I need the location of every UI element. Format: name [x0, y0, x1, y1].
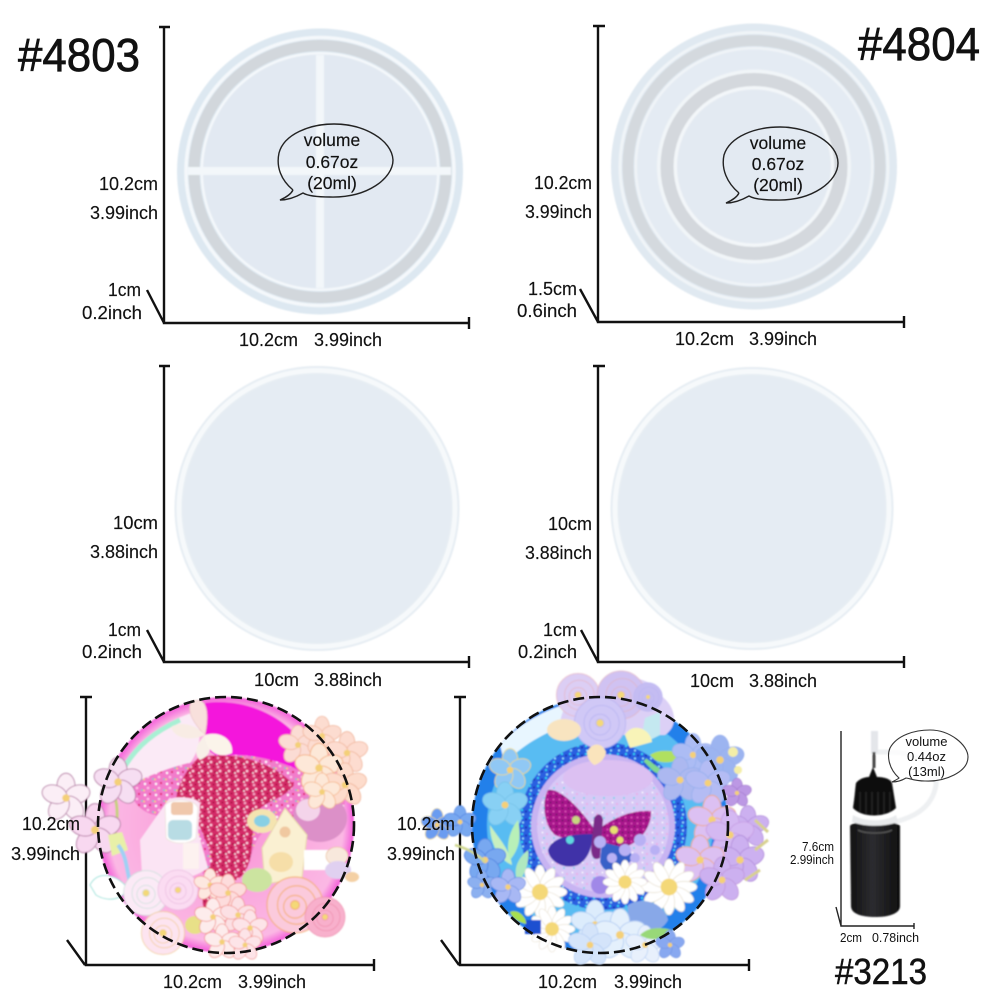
cream ticket tag: [140, 797, 208, 879]
purple pearl cluster: [293, 794, 347, 842]
glitter ring: [519, 742, 687, 910]
magenta top-right area: [205, 702, 314, 800]
dimension labels #4803: 0.2inch: [82, 302, 142, 323]
bottle body: [850, 822, 900, 917]
callout: volume #4804: (20ml): [753, 175, 803, 195]
axes for needle bottle: [836, 731, 914, 929]
callout: volume #4803: 0.67oz: [306, 152, 358, 172]
dimension labels lid right: 3.88inch: [749, 670, 817, 691]
dimension labels #4804: 10.2cm: [675, 328, 734, 349]
cap: [853, 767, 896, 816]
dimension labels pink coaster: 10.2cm: [22, 813, 80, 834]
dashed outline butterfly coaster: [472, 697, 728, 953]
dimension labels lid left: [82, 512, 382, 690]
blossoms bottom centre: [185, 868, 272, 962]
dimension labels butterfly coaster: 3.99inch: [614, 971, 682, 992]
daisies bottom: [513, 859, 697, 952]
dimension labels lid left: 3.88inch: [314, 669, 382, 690]
dimension labels #4804: 1.5cm: [528, 278, 577, 299]
butterfly: [544, 790, 651, 872]
dimension labels #4803: [82, 173, 382, 350]
white butterfly: [171, 700, 232, 760]
callout: volume #4804: volume: [750, 133, 806, 153]
axes for pink floral coaster: [67, 697, 374, 971]
axes for mold #4803: [147, 27, 469, 329]
dimension labels butterfly coaster: 10.2cm: [538, 971, 597, 992]
dimension labels bottle: 2cm: [840, 931, 862, 945]
dimension labels pink coaster: [11, 813, 306, 992]
dimension labels #4804: 3.99inch: [749, 328, 817, 349]
dimension labels bottle: 0.78inch: [872, 931, 919, 945]
dimension labels lid right: 10cm: [548, 513, 592, 534]
callout: volume #4804: 0.67oz: [752, 154, 804, 174]
callout: bottle volume: volume: [906, 734, 947, 749]
dimension labels #4803: 3.99inch: [90, 202, 158, 223]
light blue blossoms bottom: [566, 900, 686, 968]
dimension labels #4804: 10.2cm: [534, 172, 592, 193]
cream birdhouse: [262, 808, 307, 884]
dimension labels #4804: [517, 172, 817, 349]
mold #4804 with concentric rings: [611, 24, 897, 310]
dimension labels bottle: [790, 840, 919, 945]
dimension labels pink coaster: 3.99inch: [11, 843, 80, 864]
dimension labels butterfly coaster: 10.2cm: [397, 813, 455, 834]
dimension labels #4803: 1cm: [108, 279, 141, 300]
dimension labels lid right: 1cm: [543, 619, 577, 640]
glitter canopy: [130, 755, 345, 880]
axes for lid mold right: [581, 366, 904, 668]
lavender roses top: [547, 671, 688, 775]
dimension labels lid left: 10cm: [254, 669, 299, 690]
green leaves and forget-me-nots left: [419, 749, 541, 934]
dimension labels lid right: [518, 513, 817, 691]
dimension labels #4803: 10.2cm: [239, 329, 298, 350]
roses bottom: [124, 870, 345, 955]
small mouse figure: [325, 847, 359, 882]
callout: volume #4803: (20ml): [307, 173, 357, 193]
dimension labels butterfly coaster: 3.99inch: [387, 843, 455, 864]
dimension labels bottle: 7.6cm: [802, 840, 834, 854]
axes for butterfly coaster: [441, 697, 749, 971]
dimension labels lid left: 0.2inch: [82, 641, 142, 662]
dimension labels #4804: 0.6inch: [517, 300, 577, 321]
dimension labels lid right: 3.88inch: [525, 542, 592, 563]
dimension labels lid left: 10cm: [113, 512, 158, 533]
example: pink floral resin coaster: [40, 697, 370, 962]
flat lid mold right: [610, 367, 894, 650]
callout: bottle volume: 0.44oz: [907, 749, 946, 764]
axes for mold #4804: [580, 26, 904, 328]
heading: #4803: #4803: [18, 29, 140, 81]
dimension labels #4804: 3.99inch: [525, 201, 592, 222]
callout: bottle volume: [889, 730, 968, 782]
clear cap and tube: [855, 752, 936, 825]
dimension labels lid left: 1cm: [108, 619, 141, 640]
dimension labels lid left: 3.88inch: [90, 541, 158, 562]
heading: #4804: #4804: [858, 18, 980, 70]
example: blue butterfly resin coaster: [419, 671, 771, 968]
lilac centre: [537, 760, 669, 892]
callout: volume #4804: [723, 127, 838, 203]
pink lilies left: [40, 757, 144, 899]
blue flowers upper right: [655, 734, 746, 807]
pale left sky area: [112, 712, 200, 795]
peach flowers top right: [277, 716, 370, 811]
dimension labels pink coaster: 3.99inch: [238, 971, 306, 992]
dashed outline pink coaster: [98, 697, 354, 953]
dimension labels pink coaster: 10.2cm: [163, 971, 222, 992]
dimension labels #4803: 3.99inch: [314, 329, 382, 350]
heading: #3213: #3213: [835, 951, 927, 992]
flat lid mold left: [174, 366, 460, 651]
dimension labels bottle: 2.99inch: [790, 853, 834, 867]
dimension labels lid right: 10cm: [690, 670, 734, 691]
dimension labels #4803: 10.2cm: [99, 173, 158, 194]
axes for lid mold left: [147, 366, 469, 668]
callout: volume #4803: [278, 124, 393, 200]
callout: volume #4803: volume: [304, 130, 360, 150]
red glitter tree: [176, 755, 294, 918]
dimension labels lid right: 0.2inch: [518, 641, 577, 662]
pearls: [591, 834, 660, 894]
mold #4803 with cross divider: [177, 28, 463, 314]
dimension labels butterfly coaster: [387, 813, 682, 992]
callout: bottle volume: (13ml): [908, 764, 945, 779]
white collar: [852, 815, 898, 826]
purple flowers right: [674, 778, 771, 904]
icon: black needle-tip bottle: [850, 731, 936, 917]
